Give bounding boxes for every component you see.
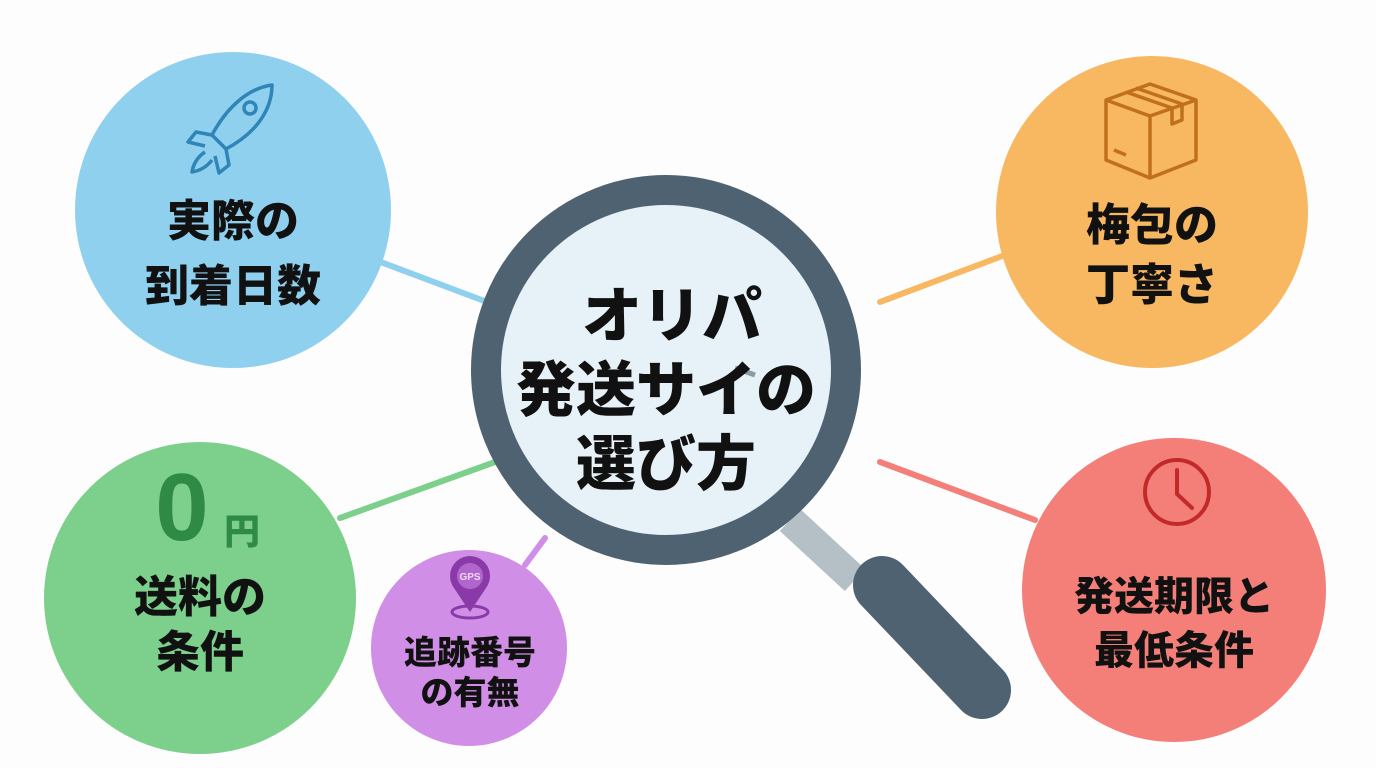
icon: GPS pin: GPS xyxy=(459,572,481,583)
title xyxy=(516,283,816,498)
panel: packaging care: 梅包の xyxy=(1086,201,1218,250)
icon: rocket xyxy=(188,85,272,173)
panel: free shipping: 円 xyxy=(224,511,260,552)
panel: tracking number xyxy=(371,550,567,746)
icon: clock xyxy=(1145,460,1209,524)
icon: GPS pin xyxy=(450,556,490,618)
panel: shipping deadline xyxy=(1022,438,1326,742)
panel: free shipping: 送料の xyxy=(134,573,266,622)
panel: shipping deadline: 発送期限と xyxy=(1074,575,1274,619)
connector lines xyxy=(340,255,1035,565)
panel: actual delivery days xyxy=(75,52,391,368)
panel: actual delivery days: 到着日数 xyxy=(145,262,321,311)
magnifier lens with title xyxy=(486,190,846,550)
title: オリパ xyxy=(582,283,762,350)
title: 選び方 xyxy=(576,431,756,498)
icon: 0 yen: 0 xyxy=(155,454,209,561)
panel: free shipping: 条件 xyxy=(156,628,244,677)
panel: shipping deadline: 最低条件 xyxy=(1094,629,1254,673)
icon: box xyxy=(1106,84,1196,178)
panel: packaging care: 丁寧さ xyxy=(1086,261,1218,310)
panel: actual delivery days: 実際の xyxy=(167,197,299,246)
panel: tracking number: の有無 xyxy=(420,674,520,711)
panel: free shipping xyxy=(44,442,356,754)
panel: packaging care xyxy=(996,56,1308,368)
magnifier handle xyxy=(790,520,982,690)
title: 発送サイの xyxy=(516,357,816,424)
panel: tracking number: 追跡番号 xyxy=(404,634,536,671)
